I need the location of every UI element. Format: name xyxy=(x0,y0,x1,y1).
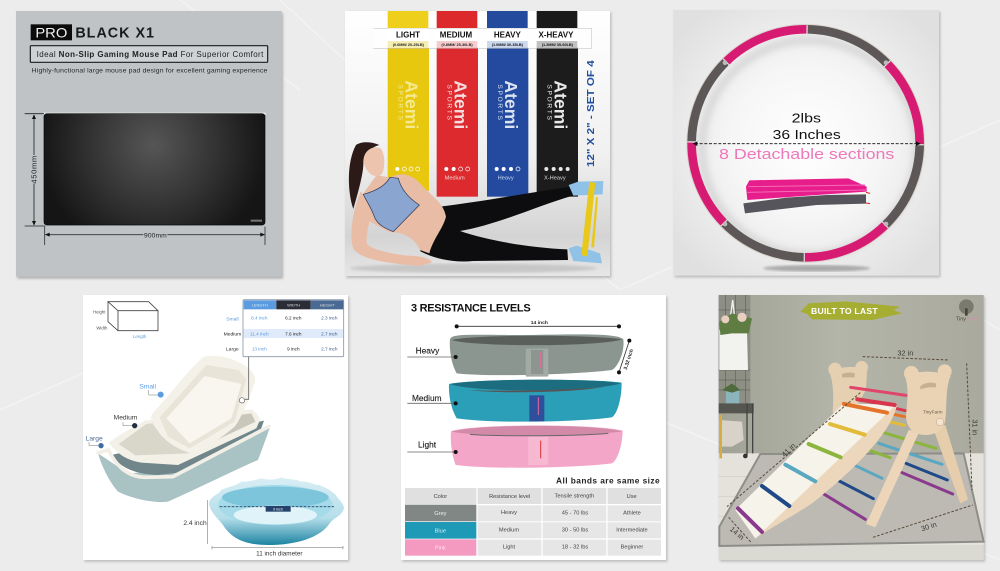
band labels: Medium xyxy=(412,393,442,403)
band labels: Light xyxy=(418,440,437,450)
size table: LENGTH xyxy=(252,303,268,308)
diameter label: 36 Inches xyxy=(773,127,841,142)
band labels: Heavy xyxy=(416,346,440,356)
size table: 2.7 inch xyxy=(321,347,338,352)
comparison table: Tensile strength xyxy=(555,493,594,499)
dimension: 30 in xyxy=(873,505,973,537)
resistance labels strip: (0.8MM/ 25-30LB) xyxy=(441,43,473,47)
dimension cube icon: Length xyxy=(133,334,147,339)
comparison table: 18 - 32 lbs xyxy=(562,545,588,551)
band: medium red: Atemi xyxy=(451,80,471,129)
heading: PRO BLACK X1: BLACK X1 xyxy=(75,26,154,42)
size table: 2.7 inch xyxy=(321,331,338,336)
pie dish xyxy=(209,477,344,545)
climbing ramp xyxy=(735,399,897,538)
shoes xyxy=(569,181,603,196)
exercise band on ankles xyxy=(581,182,595,257)
shelf and decor xyxy=(719,295,754,458)
dimension cube icon: Height xyxy=(93,310,106,315)
dimension: 14 in: 14 in xyxy=(728,525,746,542)
comparison table: Pink xyxy=(435,545,446,551)
width dimension xyxy=(455,320,621,328)
front frame: TinyFarm xyxy=(923,409,943,414)
band: medium red xyxy=(437,11,478,197)
size table: 2.3 inch xyxy=(321,316,338,321)
band: light pink xyxy=(451,425,623,468)
pie height dimension xyxy=(183,500,207,544)
band: heavy blue: SPORTS xyxy=(496,84,503,122)
comparison table: Color xyxy=(434,494,447,500)
band: light yellow xyxy=(388,11,429,191)
dimension: 41 in xyxy=(727,393,860,507)
tagline box xyxy=(30,46,268,62)
dimension: 900mm: 900mm xyxy=(144,232,167,239)
comparison table: Resistance level xyxy=(489,494,530,500)
size table: 8.4 inch xyxy=(251,316,268,321)
comparison table: 30 - 50 lbs xyxy=(562,528,588,534)
rug xyxy=(719,453,984,546)
dimension: 32 in: 32 in xyxy=(897,348,913,357)
band: medium red: SPORTS xyxy=(446,84,453,122)
wall xyxy=(719,295,984,453)
comparison table: Medium xyxy=(499,528,519,534)
size table: WIDTH xyxy=(287,303,300,308)
dish callouts: Medium xyxy=(114,414,138,421)
size table: 13 inch xyxy=(252,347,267,352)
size table: 7.6 inch xyxy=(285,331,302,336)
band: heavy grey xyxy=(450,334,624,377)
dimension: 450mm: 450mm xyxy=(30,156,39,184)
pie diameter dimension xyxy=(212,546,343,558)
comparison table: Grey xyxy=(434,511,447,517)
dimension: 31 in xyxy=(967,363,979,490)
dimension: 30 in: 30 in xyxy=(920,520,938,533)
subheading: Highly-functional large mouse pad design for excellent gaming experience xyxy=(32,68,268,75)
panel: resistance levels xyxy=(401,295,667,562)
hoop ring xyxy=(644,0,967,305)
band: light yellow: Atemi xyxy=(402,80,422,129)
sections label: 8 Detachable sections xyxy=(719,147,894,163)
resistance labels strip: X-HEAVY xyxy=(539,31,574,40)
heading: PRO BLACK X1: PRO xyxy=(35,25,67,41)
band: medium blue xyxy=(449,380,622,422)
height dimension xyxy=(617,339,635,374)
size table: 9 inch xyxy=(287,347,300,352)
banner: built to last xyxy=(800,301,902,320)
dish callouts: Large xyxy=(86,436,103,443)
dimension: 31 in: 31 in xyxy=(970,419,979,435)
dimension: 32 in xyxy=(863,348,949,360)
sports top xyxy=(363,177,419,232)
size table: Medium xyxy=(224,331,241,337)
band: x-heavy black xyxy=(537,11,578,197)
comparison table: Athlete xyxy=(623,511,641,517)
resistance labels strip: LIGHT xyxy=(396,31,420,40)
band: medium red: Medium xyxy=(445,176,465,182)
size table: Small xyxy=(226,316,239,322)
hoop shadow xyxy=(702,40,917,255)
hair xyxy=(349,142,379,209)
dimension: 14 in xyxy=(728,517,751,543)
band: heavy blue xyxy=(487,11,528,197)
band: x-heavy black: X-Heavy xyxy=(544,176,566,182)
band: heavy blue: Atemi xyxy=(501,80,521,129)
dimension: 900mm xyxy=(45,227,265,245)
torso xyxy=(363,174,446,253)
resistance labels strip: HEAVY xyxy=(494,31,521,40)
comparison table: Beginner xyxy=(621,544,643,550)
height dimension: 3.32 inch xyxy=(623,348,635,371)
large dish xyxy=(98,421,271,502)
pie diameter dimension: 11 inch diameter xyxy=(256,551,302,558)
size table xyxy=(224,300,344,357)
resistance labels strip xyxy=(373,28,592,48)
banner: built to last: BUILT TO LAST xyxy=(811,306,878,316)
comparison table: Light xyxy=(503,544,516,550)
panel: weighted hoop xyxy=(644,0,967,305)
panel: climbing triangle xyxy=(719,295,985,562)
dimension: 41 in: 41 in xyxy=(780,441,797,459)
comparison table: Intermediate xyxy=(616,528,648,534)
width dimension: 14 inch xyxy=(531,320,548,326)
dish callouts xyxy=(86,357,249,448)
band: light yellow: SPORTS xyxy=(397,84,404,122)
woman exercising xyxy=(349,142,603,273)
dish callouts: Small xyxy=(139,384,156,391)
table caption: All bands are same size xyxy=(556,475,660,485)
weight label: 2lbs xyxy=(792,110,821,125)
dimension cube icon xyxy=(93,302,158,339)
band: heavy blue: Heavy xyxy=(498,176,514,182)
size table: Large xyxy=(226,347,239,353)
band: x-heavy black: SPORTS xyxy=(546,84,553,122)
front frame xyxy=(866,364,968,527)
comparison table: Use xyxy=(627,494,637,500)
size table: 6.2 inch xyxy=(285,316,302,321)
band: x-heavy black: Atemi xyxy=(551,80,571,129)
comparison table: Blue xyxy=(435,528,446,534)
face xyxy=(363,147,384,176)
pie height dimension: 2.4 inch xyxy=(183,520,207,527)
brand logo: Farm xyxy=(967,317,980,323)
resistance labels strip: MEDIUM xyxy=(440,31,473,40)
stacked hoop sections xyxy=(743,178,870,213)
pie dish: 9 inch xyxy=(273,507,283,511)
comparison table: Heavy xyxy=(501,510,517,516)
medium dish xyxy=(109,409,260,465)
tagline box: Ideal Non-Slip Gaming Mouse Pad For Superior Comfort xyxy=(37,50,264,59)
small dish xyxy=(151,356,255,453)
brand logo xyxy=(956,299,980,323)
size table: HEIGHT xyxy=(320,303,335,308)
size table: 11.4 inch xyxy=(250,331,269,336)
panel: mouse pad xyxy=(16,11,283,279)
rungs xyxy=(823,387,953,519)
heading: 3 RESISTANCE LEVELS xyxy=(411,302,531,314)
dimension cube icon: Width xyxy=(96,326,108,331)
resistance labels strip: (1.2MM/ 35-60LB) xyxy=(542,43,574,47)
floor xyxy=(719,453,984,560)
panel: baking dishes xyxy=(83,295,349,562)
resistance labels strip: (0.6MM/ 20-25LB) xyxy=(393,43,425,47)
heading: PRO BLACK X1 xyxy=(31,24,154,42)
comparison table: 45 - 70 lbs xyxy=(562,511,588,517)
vertical size label: 12" X 2" - SET OF 4 xyxy=(586,60,597,167)
diameter arrow xyxy=(693,141,921,146)
dimension: 450mm xyxy=(25,114,45,226)
back arm xyxy=(351,192,432,266)
comparison table xyxy=(405,488,661,556)
back frame panel xyxy=(828,361,868,417)
resistance labels strip: (1.0MM/ 30-35LB) xyxy=(492,43,524,47)
band labels xyxy=(407,346,458,454)
floor shadow xyxy=(763,265,870,272)
mouse pad image xyxy=(43,113,266,225)
legs xyxy=(420,187,573,261)
panel: resistance loop bands xyxy=(345,11,611,278)
brand logo: Tiny xyxy=(956,317,966,323)
